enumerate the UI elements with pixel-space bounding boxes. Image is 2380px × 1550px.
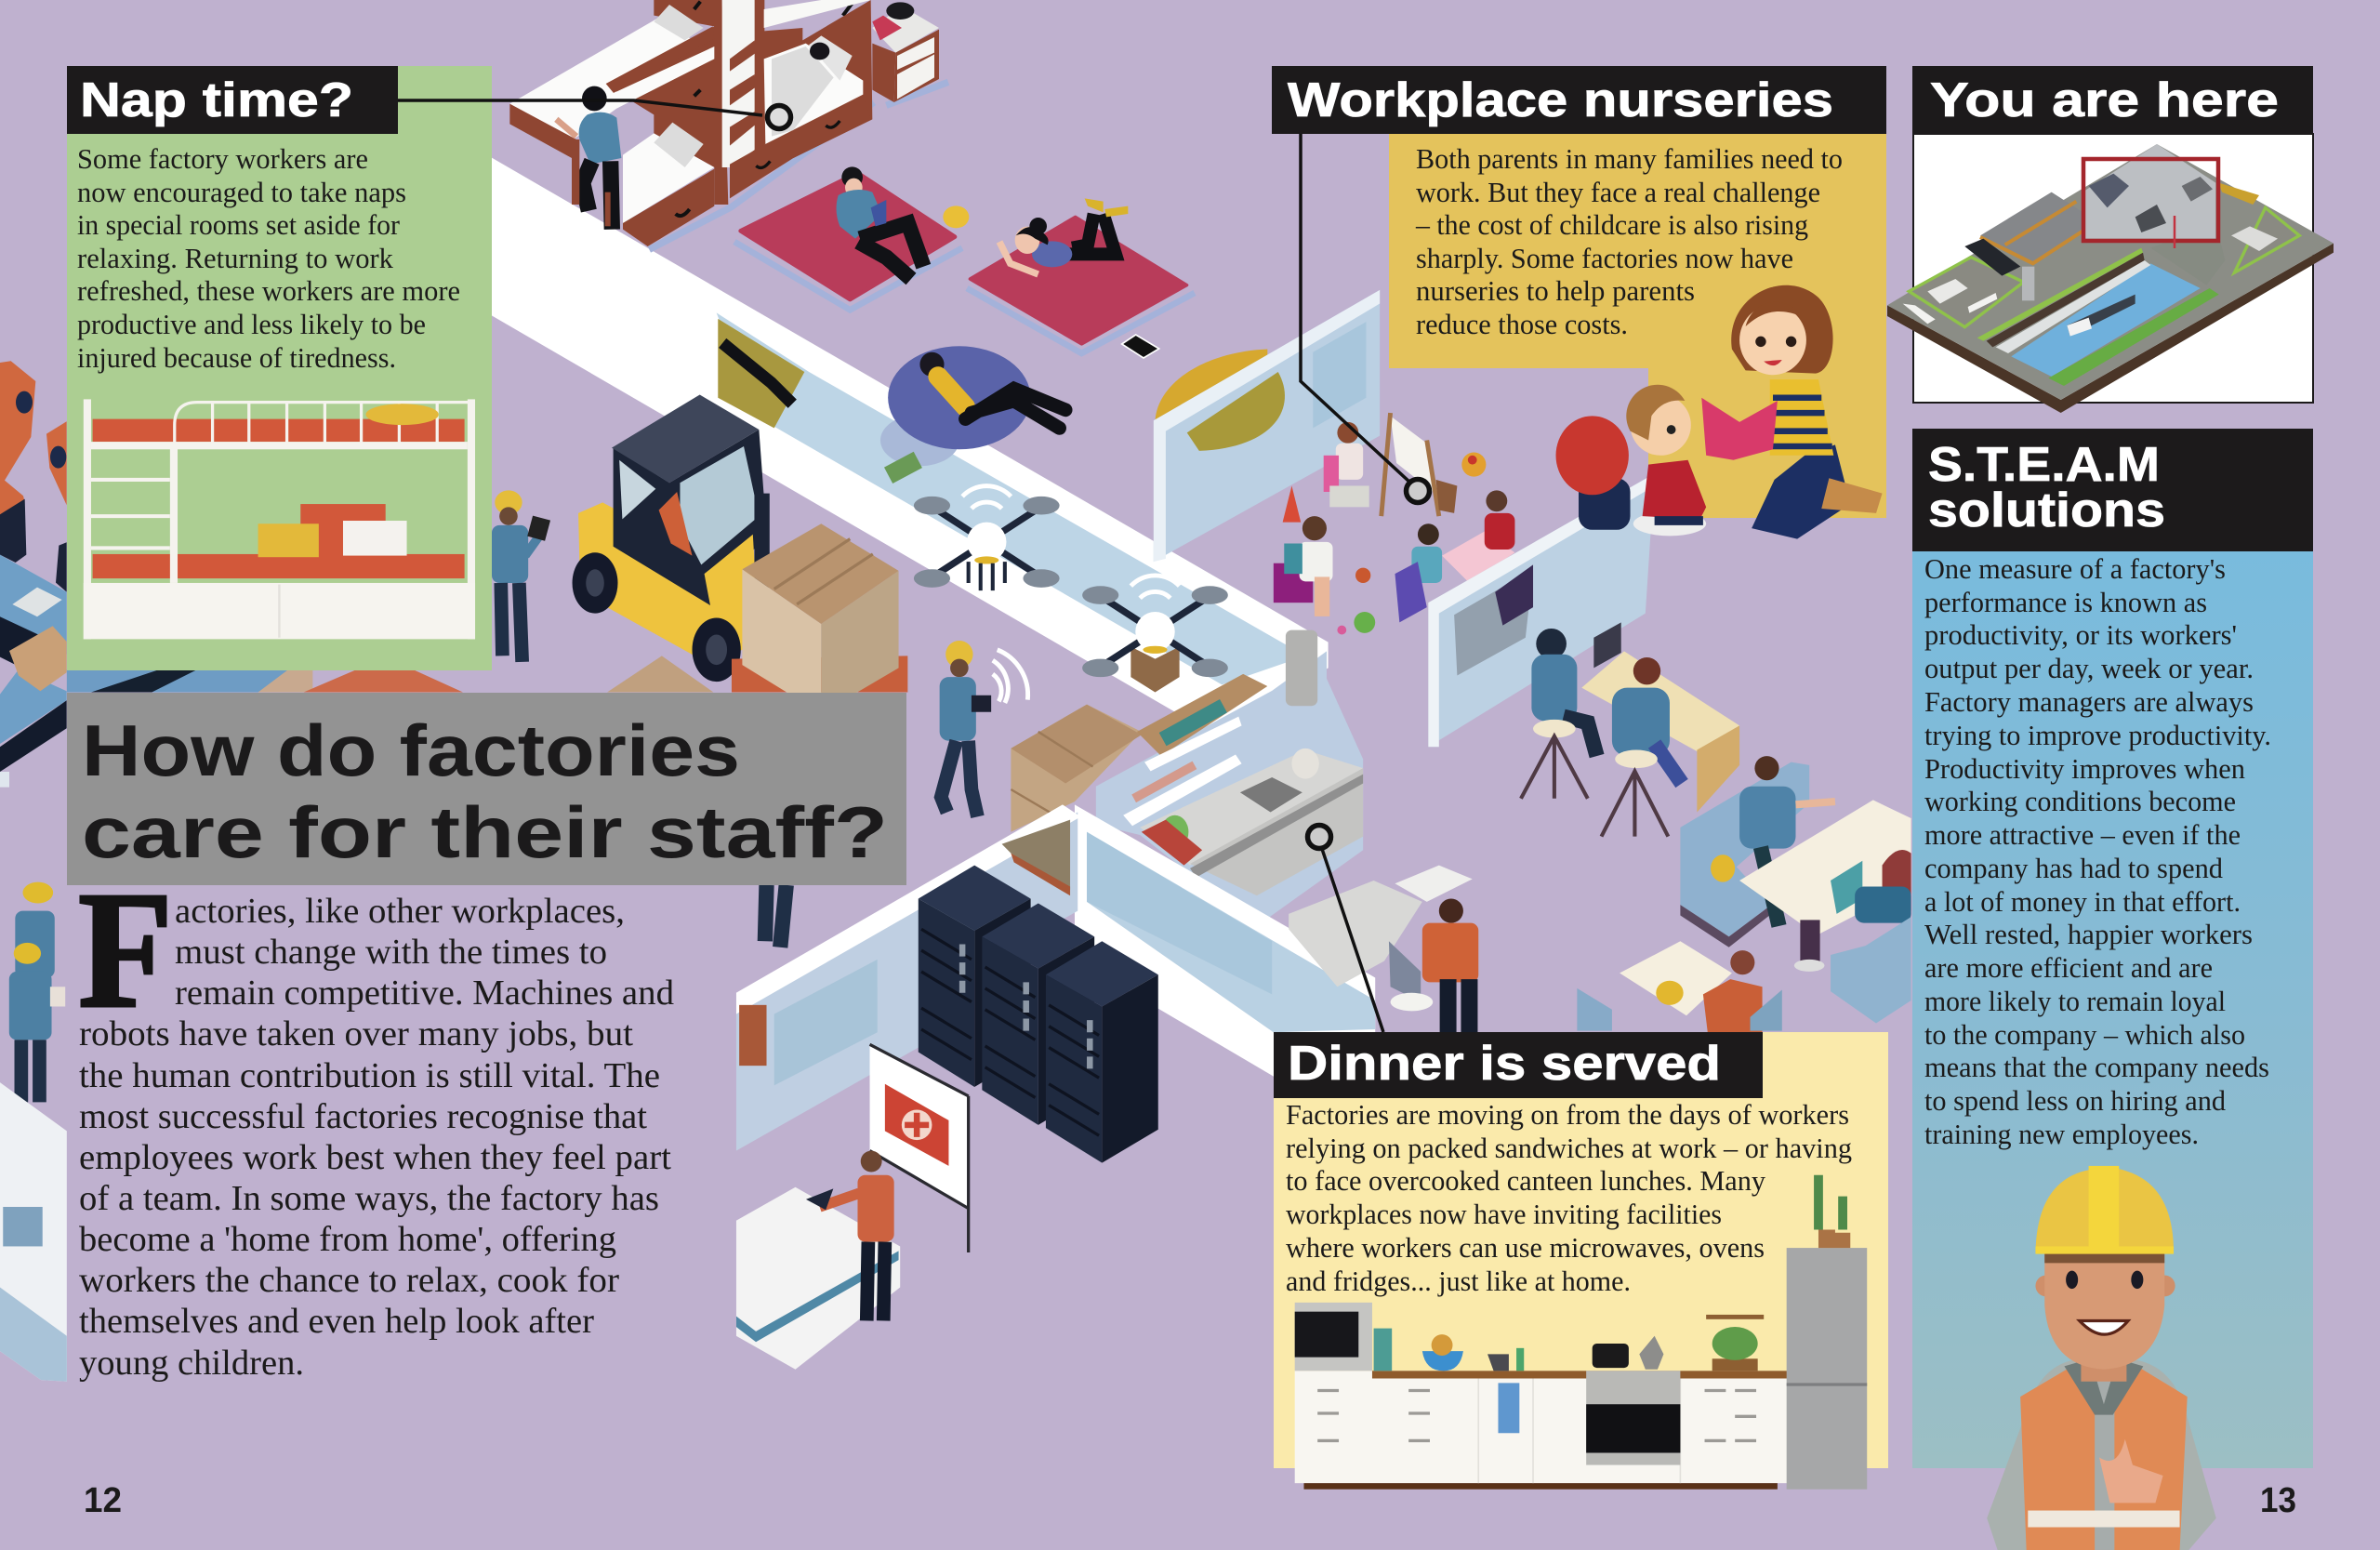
illustration: white bunk bed — [84, 399, 475, 639]
panel: Nap time — [67, 66, 492, 670]
text: Dinner body: where workers can use microwaves, ovens — [1286, 1231, 1765, 1264]
text: Nap time body — [77, 142, 460, 374]
worker with tablet — [492, 490, 550, 662]
text: nurseries body: work. But they face a real challenge — [1416, 176, 1820, 208]
text: intro body: must change with the times to — [175, 933, 607, 972]
connector line and marker: nurseries — [1301, 134, 1430, 502]
text: S.T.E.A.M body: training new employees. — [1924, 1118, 2199, 1150]
text: nurseries body: Both parents in many families need to — [1416, 142, 1843, 175]
heading: S.T.E.A.M solutions — [1912, 429, 2313, 551]
text: intro body: robots have taken over many jobs, but — [79, 1014, 633, 1053]
text: nurseries body: nurseries to help parents — [1416, 274, 1695, 307]
title line 1: How do factories — [82, 709, 740, 791]
text: nurseries body: – the cost of childcare is also rising — [1415, 208, 1808, 241]
heading: Workplace nurseries — [1272, 66, 1886, 134]
second kitchen counter and worker — [1289, 866, 1478, 1032]
text: intro body: of a team. In some ways, the factory has — [79, 1179, 659, 1218]
bedside cabinet — [872, 2, 939, 102]
panel: Dinner is served — [1274, 1032, 1888, 1490]
text: intro body: employees work best when they feel part — [79, 1138, 671, 1177]
text: Nap time body: refreshed, these workers are more — [77, 274, 460, 307]
connector line and marker: Dinner — [1307, 826, 1383, 1032]
text: Nap time body: now encouraged to take naps — [77, 176, 406, 208]
heading: You are here: You are here — [1930, 73, 2279, 127]
panel: S.T.E.A.M solutions — [1912, 429, 2313, 1550]
blue beanbag with woman — [880, 346, 1065, 484]
ladder column — [722, 0, 756, 167]
text: Dinner body: to face overcooked canteen lunches. Many — [1286, 1164, 1765, 1197]
red floor cushion with lounging woman — [943, 198, 1195, 358]
first aid sign — [870, 1044, 969, 1252]
text: S.T.E.A.M body: company has had to spend — [1924, 852, 2223, 884]
factory cutaway illustration — [0, 137, 1911, 1382]
text: S.T.E.A.M body: trying to improve productivity. — [1924, 719, 2271, 751]
text: S.T.E.A.M body: a lot of money in that effort. — [1924, 885, 2241, 918]
text: Nap time body: Some factory workers are — [77, 142, 368, 175]
illustration: kitchen — [1295, 1175, 1867, 1490]
heading: Nap time — [67, 66, 398, 134]
text: Nap time body: productive and less likely to be — [77, 308, 426, 340]
heading: S.T.E.A.M solutions: S.T.E.A.M — [1928, 438, 2160, 492]
page number 12: 12 — [84, 1481, 122, 1520]
staff kitchen block — [1096, 630, 1363, 926]
text: S.T.E.A.M body: Well rested, happier workers — [1924, 918, 2253, 950]
text: S.T.E.A.M body — [1924, 552, 2271, 1150]
illustration: smiling construction worker — [1987, 1166, 2216, 1550]
first aid bed — [736, 1187, 900, 1370]
lounge sofas and table — [1680, 756, 1911, 1023]
text: S.T.E.A.M body: more attractive – even if the — [1924, 818, 2241, 851]
drop cap: F — [78, 857, 173, 1042]
text: Nap time body: injured because of tiredness. — [77, 341, 396, 374]
small dining table — [1577, 941, 1782, 1032]
text: S.T.E.A.M body: productivity, or its workers' — [1924, 618, 2237, 651]
stacked boxes — [1011, 705, 1142, 832]
orange robot arms and blue conveyor — [0, 361, 67, 788]
text: nurseries body: reduce those costs. — [1416, 308, 1628, 340]
text: nurseries body — [1415, 142, 1843, 340]
sleeping worker alcove — [718, 319, 804, 428]
tablet on the floor — [1122, 335, 1159, 358]
text: Dinner body — [1286, 1098, 1852, 1297]
back bunk right — [764, 0, 872, 158]
text: S.T.E.A.M body: to the company – which also — [1924, 1018, 2245, 1051]
text: intro body — [79, 892, 674, 1383]
nurse at bed — [806, 1151, 894, 1320]
text: Dinner body: workplaces now have inviting facilities — [1286, 1198, 1722, 1230]
office desk with workers — [1521, 622, 1739, 837]
lower walls and corridor — [736, 804, 1375, 1151]
back bunk left — [509, 19, 714, 139]
drone carrying parcel — [1082, 576, 1228, 693]
text: intro body: most successful factories recognise that — [79, 1097, 647, 1136]
text: intro body: the human contribution is still vital. The — [79, 1056, 660, 1095]
left edge white machine — [0, 1082, 67, 1382]
text: S.T.E.A.M body: performance is known as — [1924, 586, 2207, 618]
text: S.T.E.A.M body: Factory managers are always — [1924, 685, 2254, 718]
text: intro body: workers the chance to relax, cook for — [79, 1261, 619, 1300]
text: intro body: become a 'home from home', offering — [79, 1220, 616, 1259]
text: intro body: remain competitive. Machines and — [175, 974, 674, 1013]
left edge workers — [9, 882, 65, 1102]
white walkway with blue floor — [456, 137, 1329, 735]
text: S.T.E.A.M body: One measure of a factory's — [1924, 552, 2226, 585]
text: intro body: actories, like other workplaces, — [175, 892, 625, 931]
panel: Workplace nurseries — [1272, 66, 1886, 518]
text: S.T.E.A.M body: more likely to remain loyal — [1924, 985, 2226, 1017]
locator box — [2083, 159, 2218, 248]
page number 13: 13 — [2260, 1481, 2296, 1520]
panel: title — [67, 693, 906, 885]
text: S.T.E.A.M body: are more efficient and are — [1924, 951, 2213, 984]
title line 2: care for their staff? — [82, 791, 888, 873]
text: intro body: themselves and even help look after — [79, 1302, 594, 1341]
text: Dinner body: Factories are moving on from the days of workers — [1286, 1098, 1849, 1131]
drone hovering — [914, 486, 1060, 590]
text: Nap time body: relaxing. Returning to work — [77, 242, 393, 274]
heading: Dinner is served: Dinner is served — [1288, 1037, 1721, 1091]
bunk room — [509, 0, 948, 249]
red floor cushion with reader — [734, 166, 962, 310]
text: S.T.E.A.M body: to spend less on hiring and — [1924, 1084, 2226, 1117]
heading: You are here — [1912, 66, 2313, 134]
text: S.T.E.A.M body: working conditions become — [1924, 785, 2236, 817]
text: S.T.E.A.M body: Productivity improves when — [1924, 752, 2245, 785]
heading: S.T.E.A.M solutions: solutions — [1928, 484, 2165, 537]
forklift — [573, 395, 770, 682]
panel: You are here — [1887, 66, 2334, 413]
nursery wall with beanbag — [1154, 290, 1380, 562]
blue strip below Nap panel — [67, 656, 713, 693]
text: Nap time body: in special rooms set aside for — [77, 208, 401, 241]
worker climbing bunk — [556, 86, 621, 230]
text: Dinner body: and fridges... just like at home. — [1286, 1265, 1631, 1297]
worker legs behind title — [765, 885, 787, 947]
server racks — [919, 866, 1158, 1163]
nursery children and toys — [1274, 413, 1514, 634]
worker with wifi tablet — [940, 641, 1028, 816]
text: S.T.E.A.M body: means that the company needs — [1924, 1051, 2269, 1083]
text: Dinner body: relying on packed sandwiches at work – or having — [1286, 1132, 1852, 1164]
cardboard box on pallet — [732, 523, 907, 713]
map: isometric factory site — [1887, 144, 2334, 413]
reading group: woman and two children — [1556, 285, 1883, 539]
heading: Nap time: Nap time? — [80, 73, 353, 127]
text: intro body: young children. — [79, 1344, 304, 1383]
connector line and marker: Nap time — [398, 100, 790, 128]
text: S.T.E.A.M body: output per day, week or year. — [1924, 652, 2254, 684]
text: nurseries body: sharply. Some factories now have — [1416, 242, 1793, 274]
office divider wall — [1428, 473, 1655, 747]
heading: Workplace nurseries: Workplace nurseries — [1288, 73, 1833, 127]
heading: Dinner is served — [1274, 1032, 1763, 1098]
